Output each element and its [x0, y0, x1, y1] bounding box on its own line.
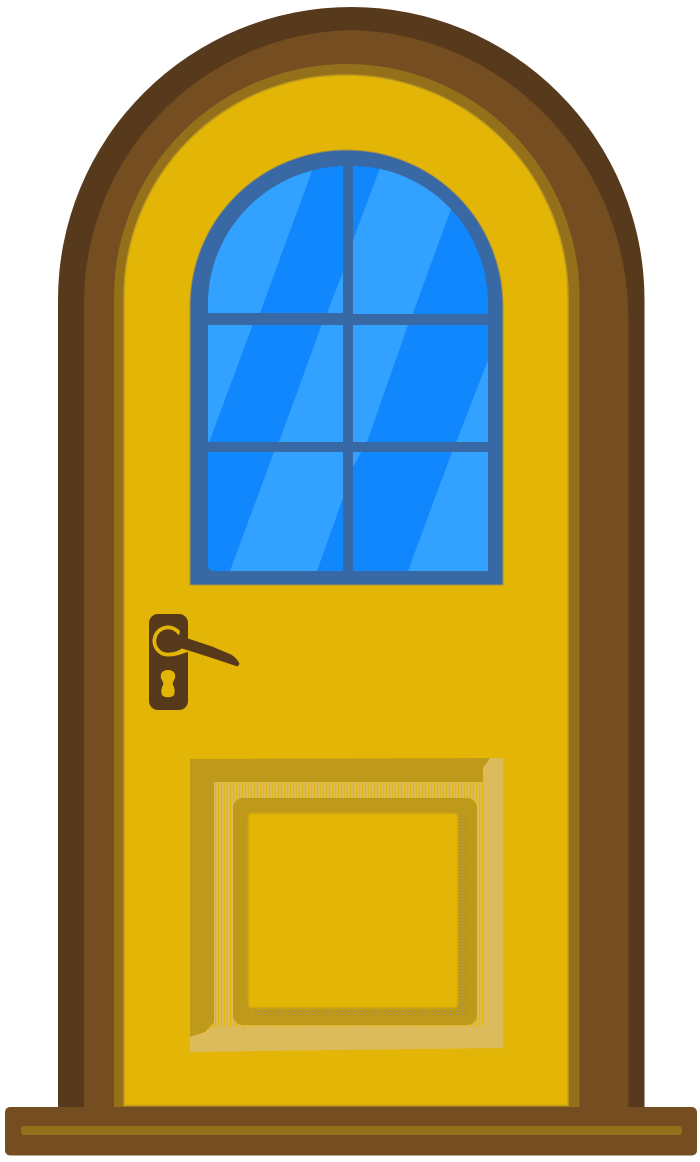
handle lever — [169, 634, 240, 666]
handle knob — [156, 629, 180, 653]
keyhole — [161, 670, 175, 697]
window — [190, 150, 503, 585]
panel centre — [248, 814, 458, 1008]
door frame inner ochre edge — [114, 64, 580, 1108]
recessed door panel — [190, 758, 503, 1052]
panel inner shaded ring texture — [253, 815, 466, 1016]
door sill — [5, 1107, 697, 1156]
panel inner shaded ring — [233, 798, 477, 1025]
panel dithered groove — [214, 782, 483, 1027]
handle knob ring — [152, 626, 190, 656]
sill stripe — [21, 1126, 682, 1135]
handle backplate — [149, 614, 188, 710]
sill board — [5, 1107, 697, 1156]
window glass panes — [200, 160, 500, 580]
door leaf — [124, 75, 568, 1106]
panel shaded top-left bevel — [190, 758, 490, 1037]
window frame — [190, 150, 503, 585]
door frame outer dark trim — [58, 7, 644, 1108]
door handle — [149, 614, 240, 710]
door frame mid brown — [84, 30, 628, 1108]
panel lit bottom-right bevel — [190, 758, 503, 1052]
